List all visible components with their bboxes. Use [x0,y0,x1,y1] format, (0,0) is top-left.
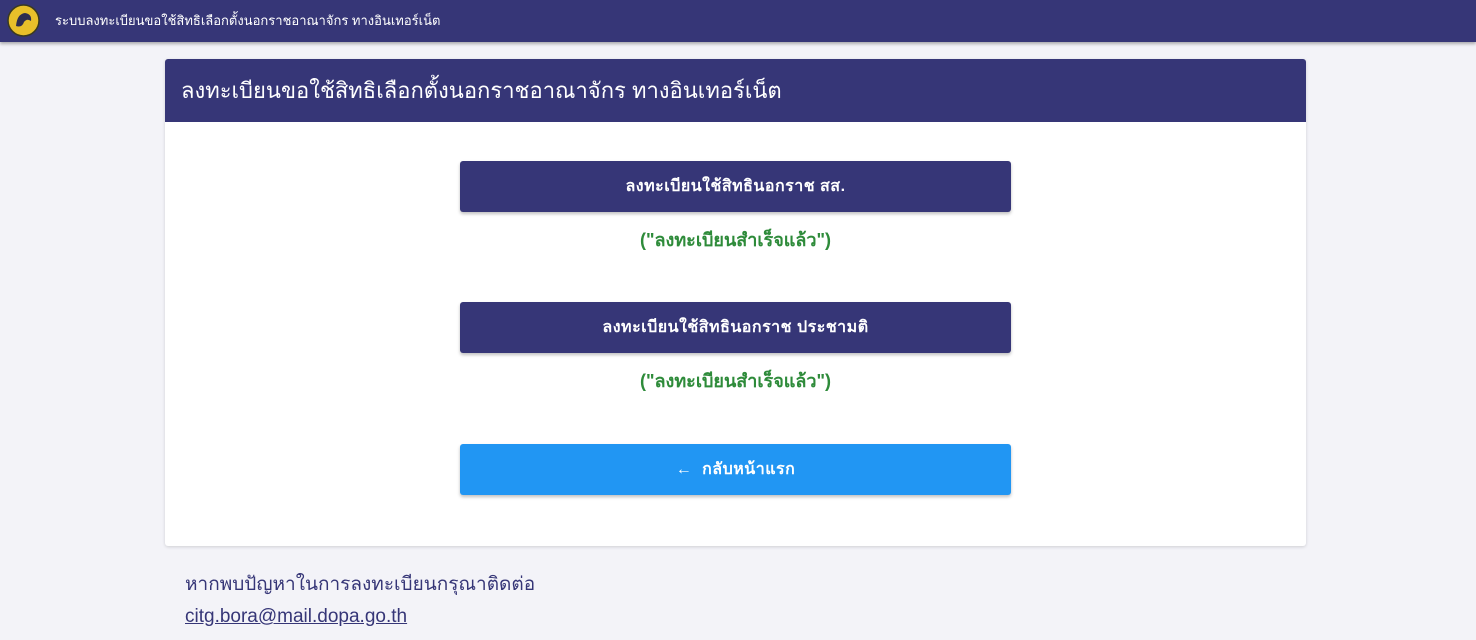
panel: main card [165,59,1306,546]
button: house of representatives [460,161,1011,212]
button: back to home: ← กลับหน้าแรก [676,461,795,478]
card heading [165,59,1306,122]
contact text [185,573,535,627]
button: house of representatives: ลงทะเบียนใช้สิทธินอกราช สส. [625,178,846,195]
button: referendum [460,302,1011,353]
status text 2: ("ลงทะเบียนสำเร็จแล้ว") [640,371,831,391]
button: back to home [460,444,1011,495]
top bar [0,0,1476,42]
card heading: ลงทะเบียนขอใช้สิทธิเลือกตั้งนอกราชอาณาจักร ทางอินเทอร์เน็ต [181,78,782,103]
status text 1: ("ลงทะเบียนสำเร็จแล้ว") [640,230,831,250]
button: referendum: ลงทะเบียนใช้สิทธินอกราช ประชามติ [602,319,869,336]
icon: emblem [7,4,40,37]
site title: ระบบลงทะเบียนขอใช้สิทธิเลือกตั้งนอกราชอาณาจักร ทางอินเทอร์เน็ต [55,13,440,28]
contact text: หากพบปัญหาในการลงทะเบียนกรุณาติดต่อ [185,574,535,595]
contact text: citg.bora@mail.dopa.go.th [185,606,407,627]
